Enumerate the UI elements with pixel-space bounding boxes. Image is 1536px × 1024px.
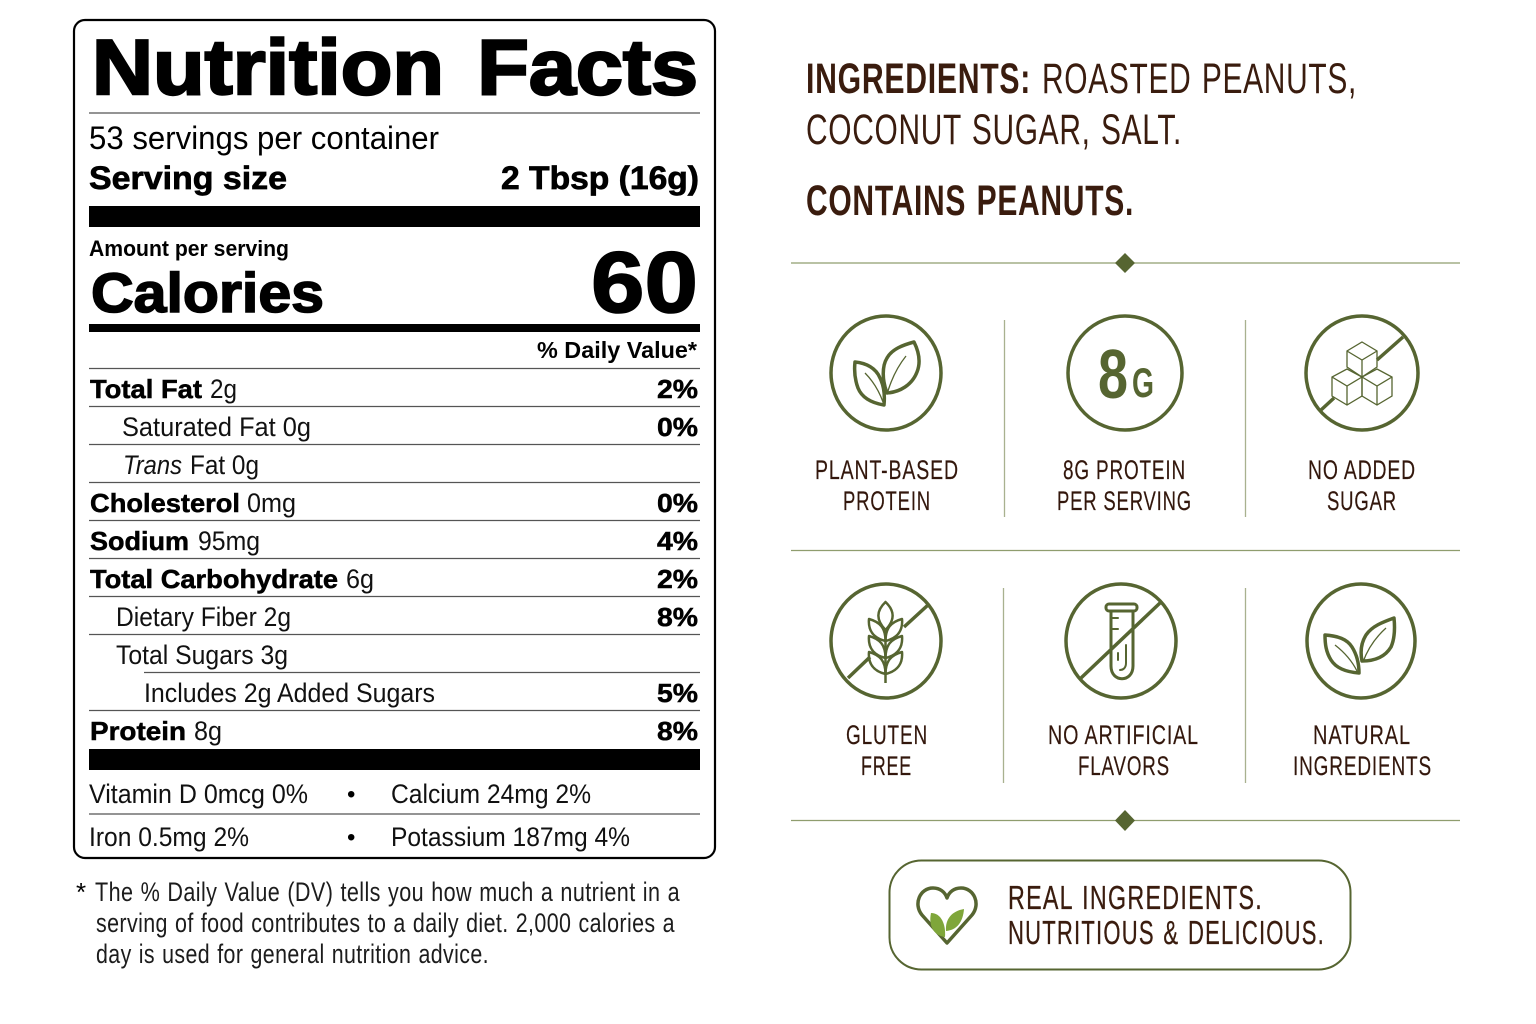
badge label <box>846 720 928 781</box>
row: added sugars <box>144 678 698 708</box>
badge label <box>1048 720 1199 781</box>
row: total carbohydrate: 6g <box>346 564 374 594</box>
badge label: PROTEIN <box>843 486 931 516</box>
badge: no artificial flavors <box>1048 584 1199 781</box>
row: sodium: Sodium <box>90 526 189 556</box>
badge label: GLUTEN <box>846 720 928 750</box>
vitamins row two: Potassium 187mg 4% <box>391 822 630 852</box>
badge label: PER SERVING <box>1057 486 1192 516</box>
row: total carbohydrate <box>90 564 698 594</box>
calories heading: Calories <box>91 261 324 324</box>
badge: plant-based protein <box>815 316 959 516</box>
row: protein: 8g <box>194 716 222 746</box>
footnote <box>76 877 680 969</box>
badge label: SUGAR <box>1327 486 1397 516</box>
amount per serving: Amount per serving <box>89 236 289 261</box>
servings per container: 53 servings per container <box>89 120 439 156</box>
row: trans fat <box>123 450 259 480</box>
badge: no added sugar <box>1306 316 1418 516</box>
footnote: * <box>76 877 86 907</box>
footnote: The % Daily Value (DV) tells you how much a nutrient in a <box>95 877 680 907</box>
footnote: day is used for general nutrition advice. <box>96 939 489 969</box>
badge label <box>815 455 959 516</box>
calories value: 60 <box>591 235 698 331</box>
divider with diamond <box>791 253 1460 273</box>
badge label: 8G PROTEIN <box>1063 455 1186 485</box>
row: protein: 8% <box>657 716 698 746</box>
vitamins row one: Vitamin D 0mcg 0% <box>89 779 308 809</box>
badge label <box>1057 455 1192 516</box>
footnote: serving of food contributes to a daily diet. 2,000 calories a <box>96 908 675 938</box>
row: added sugars: Includes 2g Added Sugars <box>144 678 435 708</box>
panel: nutrition facts label <box>74 20 715 858</box>
badge label: FLAVORS <box>1078 751 1170 781</box>
icon: 8G <box>1068 316 1182 430</box>
row: added sugars: 5% <box>657 678 698 708</box>
ingredients text: INGREDIENTS: <box>806 55 1031 103</box>
icon: crossed test tube <box>1066 584 1176 698</box>
ingredients text <box>806 55 1357 154</box>
badge label: FREE <box>861 751 912 781</box>
badge: natural ingredients <box>1293 584 1432 781</box>
vitamins row one: Calcium 24mg 2% <box>391 779 591 809</box>
ingredients text: COCONUT SUGAR, SALT. <box>806 106 1182 154</box>
vitamins row two: • <box>347 824 355 851</box>
row: saturated fat: 0% <box>657 412 698 442</box>
row: sodium: 95mg <box>198 526 260 556</box>
row: cholesterol: 0mg <box>247 488 296 518</box>
icon: leaves <box>1307 584 1415 698</box>
serving size row: 2 Tbsp (16g) <box>501 160 699 196</box>
row: total fat: Total Fat <box>90 374 202 404</box>
row: trans fat: Trans <box>123 450 182 480</box>
callout: real ingredients <box>890 860 1350 970</box>
badge label: INGREDIENTS <box>1293 751 1432 781</box>
row: dietary fiber: 8% <box>657 602 698 632</box>
badge label <box>1293 720 1432 781</box>
row: total fat <box>90 374 698 404</box>
icon: leaves <box>831 316 941 430</box>
row: cholesterol <box>90 488 698 518</box>
row: saturated fat <box>122 412 698 442</box>
callout text: NUTRITIOUS & DELICIOUS. <box>1008 914 1325 951</box>
badge label: NO ARTIFICIAL <box>1048 720 1199 750</box>
icon: heart with leaves <box>918 888 976 943</box>
vitamins row two: Iron 0.5mg 2% <box>89 822 249 852</box>
row: protein: Protein <box>90 716 186 746</box>
row: sodium: 4% <box>657 526 698 556</box>
heading: Nutrition Facts: Nutrition Facts <box>92 23 698 111</box>
badge: gluten free <box>831 584 941 781</box>
row: trans fat: Fat 0g <box>190 450 259 480</box>
row: cholesterol: 0% <box>657 488 698 518</box>
icon: crossed wheat <box>831 584 941 698</box>
icon: crossed sugar cubes <box>1306 316 1418 430</box>
row: saturated fat: Saturated Fat 0g <box>122 412 311 442</box>
vitamins row one <box>89 779 591 809</box>
row: sodium <box>90 526 698 556</box>
row: dietary fiber <box>116 602 698 632</box>
row: total carbohydrate: 2% <box>657 564 698 594</box>
row: total carbohydrate: Total Carbohydrate <box>90 564 338 594</box>
serving size row: Serving size <box>89 160 287 196</box>
callout text: REAL INGREDIENTS. <box>1008 879 1263 916</box>
row: total sugars: Total Sugars 3g <box>116 640 288 670</box>
vitamins row two <box>89 822 630 852</box>
badge label: NATURAL <box>1313 720 1411 750</box>
row: cholesterol: Cholesterol <box>90 488 240 518</box>
row: protein <box>90 716 698 746</box>
vitamins row one: • <box>347 781 355 808</box>
icon: 8G: G <box>1132 359 1154 406</box>
badge: 8g protein per serving <box>1057 316 1192 516</box>
callout text <box>1008 879 1325 951</box>
allergen statement: CONTAINS PEANUTS. <box>806 177 1134 225</box>
badge label: PLANT-BASED <box>815 455 959 485</box>
badge label <box>1308 455 1416 516</box>
badge label: NO ADDED <box>1308 455 1416 485</box>
icon: 8G: 8 <box>1098 335 1128 413</box>
row: dietary fiber: Dietary Fiber 2g <box>116 602 291 632</box>
daily value header: % Daily Value* <box>537 337 697 363</box>
divider with diamond <box>791 810 1460 831</box>
ingredients text: ROASTED PEANUTS, <box>1042 55 1357 103</box>
row: total fat: 2% <box>657 374 698 404</box>
serving size row <box>89 160 699 196</box>
row: total fat: 2g <box>210 374 237 404</box>
